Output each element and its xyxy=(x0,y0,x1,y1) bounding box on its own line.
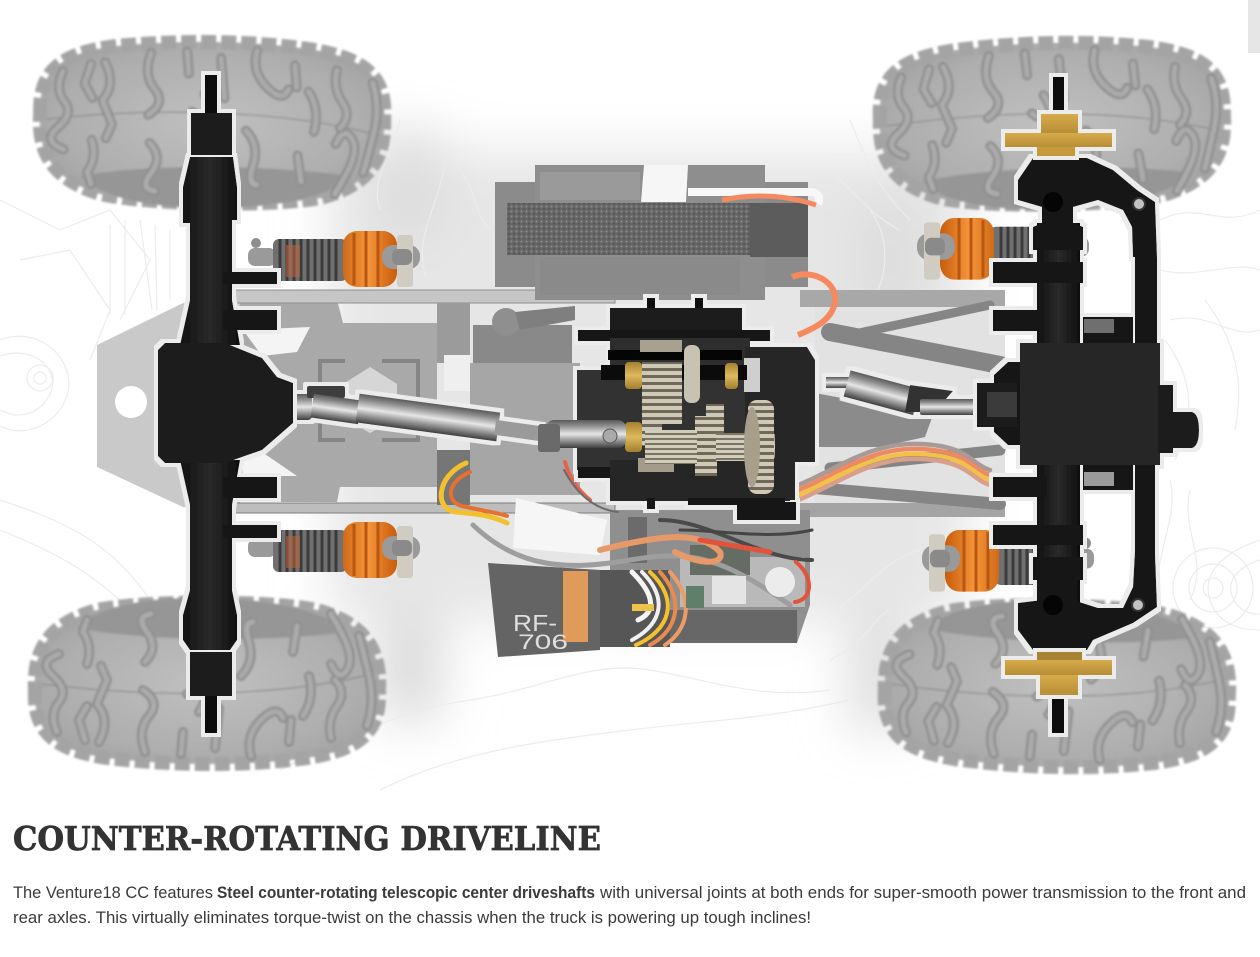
rear axle xyxy=(158,75,293,733)
link blocks xyxy=(1083,317,1133,345)
axle arms xyxy=(223,272,277,284)
yoke face xyxy=(987,392,1017,417)
shock: top right xyxy=(917,218,1089,280)
intro text: The Venture18 CC features xyxy=(13,884,213,902)
shock: top left xyxy=(248,231,420,287)
suspension links xyxy=(815,305,1000,504)
faded chassis xyxy=(97,290,1005,517)
bottom knuckle xyxy=(1018,465,1157,650)
differential housing xyxy=(158,343,293,463)
battery wires xyxy=(688,192,819,204)
front yoke xyxy=(920,399,978,415)
right block xyxy=(745,347,815,500)
receiver channel strip xyxy=(563,571,588,642)
telescopic shaft xyxy=(356,394,500,441)
receiver model text: RF- xyxy=(513,610,557,636)
motor xyxy=(815,393,933,447)
wire bundle xyxy=(441,462,812,645)
tyre: rear left bottom xyxy=(35,598,379,764)
top knuckle xyxy=(1018,158,1157,345)
output yoke xyxy=(546,420,626,448)
bright gap xyxy=(744,358,760,392)
universal joint rear xyxy=(307,386,345,398)
rear center driveshaft xyxy=(290,386,542,441)
transmission housing xyxy=(577,298,815,520)
servo body xyxy=(470,363,580,495)
front tip xyxy=(826,377,850,388)
receiver and wiring xyxy=(441,462,812,657)
receiver tray xyxy=(600,510,810,647)
front rails xyxy=(800,290,1005,307)
link pins xyxy=(1084,319,1114,333)
lower black shaft xyxy=(601,365,747,380)
scrollbar thumb xyxy=(1248,0,1260,53)
bottom hex xyxy=(190,652,232,696)
tyre: front right top xyxy=(878,40,1226,212)
top stud xyxy=(1053,77,1064,115)
front center driveshaft xyxy=(826,370,978,415)
front axle xyxy=(977,77,1199,733)
servo column xyxy=(437,303,470,363)
main case xyxy=(577,370,752,470)
large spur gear xyxy=(748,400,774,494)
secondary gears xyxy=(706,404,724,434)
circuit board part xyxy=(712,576,746,604)
pinion nub xyxy=(1158,385,1199,453)
shock: bottom left xyxy=(248,522,420,578)
servo horn xyxy=(473,325,572,363)
skid plate hole xyxy=(115,386,147,418)
upper gears xyxy=(640,340,662,352)
bottom case xyxy=(578,467,612,478)
differential bulge xyxy=(994,362,1022,445)
front joint xyxy=(905,385,953,412)
shock: bottom right xyxy=(922,530,1094,592)
top case xyxy=(610,308,742,332)
skid plate xyxy=(97,303,240,507)
plate bracket outline xyxy=(320,361,418,440)
soft shadow under chassis xyxy=(330,130,970,730)
battery label xyxy=(641,165,688,202)
velcro strap xyxy=(507,203,750,255)
gold hex hub: top xyxy=(1005,114,1112,156)
lower tube xyxy=(180,460,240,650)
title: COUNTER-ROTATING DRIVELINE xyxy=(13,819,601,858)
differential cover xyxy=(1020,343,1160,465)
top flare xyxy=(180,157,240,345)
transmission gears xyxy=(538,340,775,494)
rear yoke xyxy=(290,394,312,420)
shift ring xyxy=(684,345,700,403)
axle arms xyxy=(993,262,1083,283)
description paragraph xyxy=(13,884,1246,927)
bottom stud xyxy=(205,696,217,733)
bottom stud xyxy=(1052,695,1064,733)
battery pack xyxy=(495,165,835,335)
front axle details xyxy=(987,192,1145,615)
emphasised text: Steel counter-rotating telescopic center driveshafts xyxy=(217,884,595,902)
axle body xyxy=(1037,223,1080,613)
second line: rear axles. This virtually eliminates torque-twist on the chassis when the truck is powering up tough inclines! xyxy=(13,909,811,927)
bearing 3 xyxy=(725,363,738,389)
plate cutouts xyxy=(243,327,310,476)
tyre: front right bottom xyxy=(883,598,1231,770)
first line continuation: with universal joints at both ends for super-smooth power transmission to the front and xyxy=(599,884,1246,902)
knuckle pivots xyxy=(1043,192,1063,212)
transmission wires xyxy=(796,444,990,501)
receiver model number: 706 xyxy=(518,631,568,654)
top hex xyxy=(191,113,232,155)
front area fill xyxy=(815,307,1005,503)
bearing 1 xyxy=(625,362,642,389)
bearing 2 xyxy=(625,422,642,452)
capacitor xyxy=(765,567,795,597)
lower counter shaft xyxy=(645,430,697,464)
upper black shaft xyxy=(608,350,742,360)
topographic contour background xyxy=(0,120,1260,790)
front shaft xyxy=(844,370,920,415)
tyre: rear left top xyxy=(38,39,386,211)
zip tie xyxy=(628,517,647,563)
receiver box xyxy=(488,563,600,657)
gold hex hub: bottom xyxy=(1005,652,1112,695)
yoke xyxy=(977,383,1017,427)
servo plug xyxy=(513,498,607,555)
thin inner shaft xyxy=(494,420,542,441)
bottom rail xyxy=(235,503,615,513)
top rail xyxy=(235,290,615,303)
top tabs xyxy=(647,298,655,310)
main chassis plate xyxy=(240,300,437,502)
connector pins xyxy=(632,604,654,611)
top stud xyxy=(205,75,217,113)
